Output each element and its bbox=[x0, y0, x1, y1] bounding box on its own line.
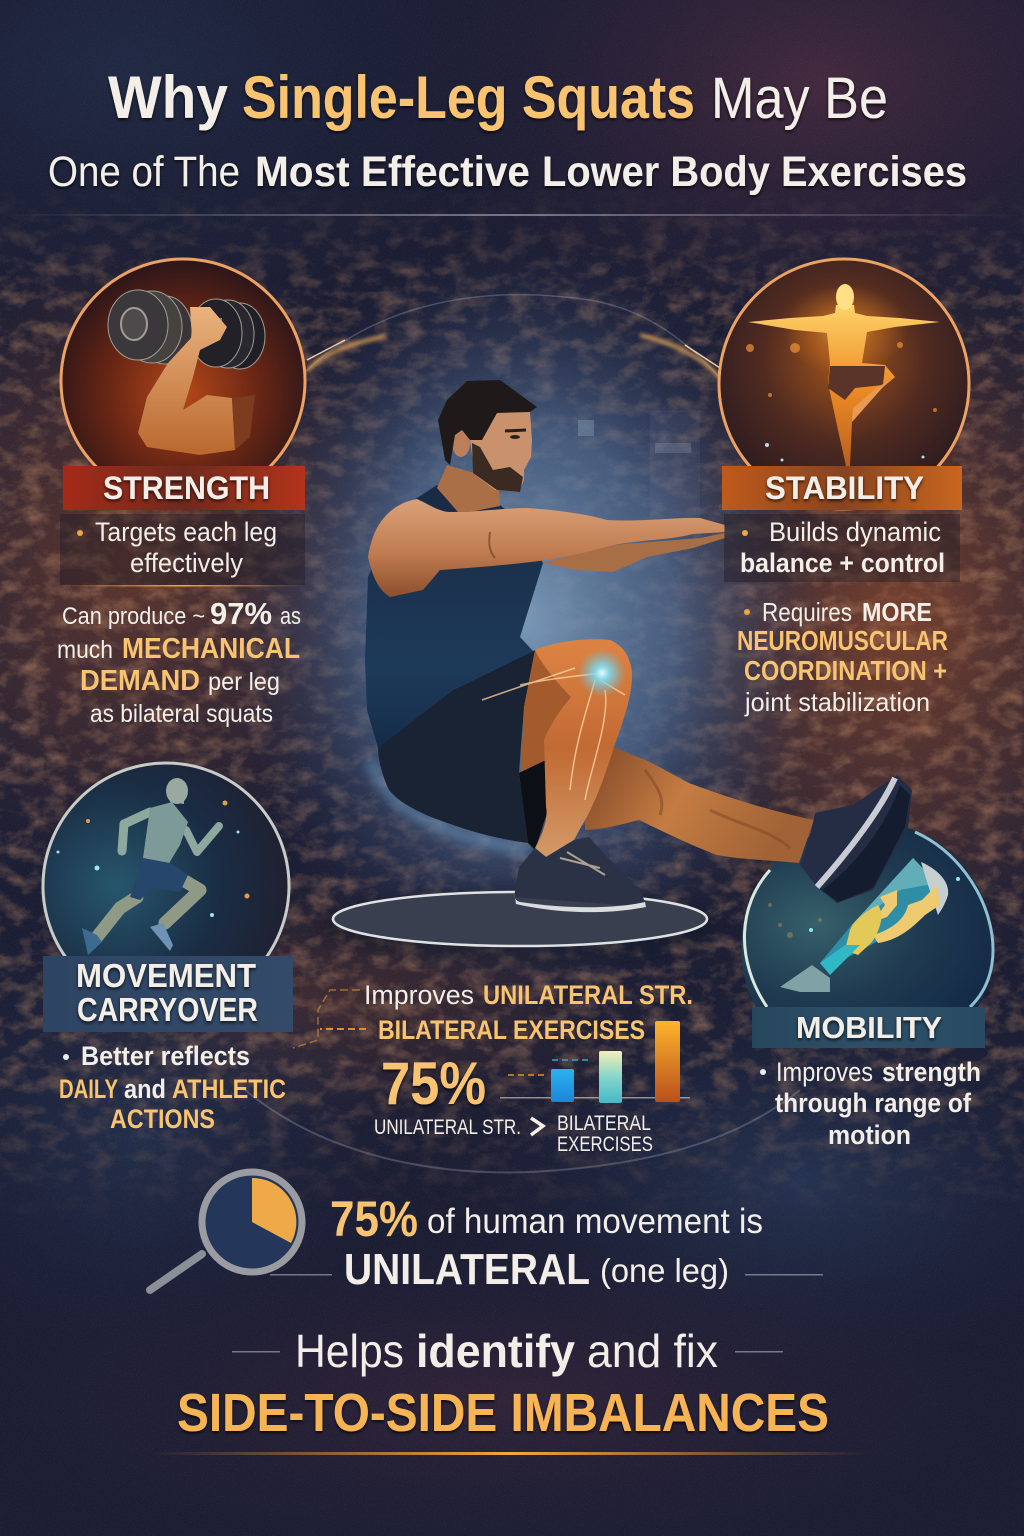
unilateral stat text: of human movement is bbox=[427, 1202, 763, 1241]
strength banner bbox=[63, 466, 305, 510]
mobility text: Improves bbox=[776, 1057, 873, 1087]
stability icon bbox=[718, 258, 970, 510]
back arm bbox=[543, 533, 725, 572]
hair bbox=[438, 380, 537, 465]
shorts bbox=[378, 650, 535, 843]
stability bullet bbox=[724, 514, 960, 582]
mobility text: motion bbox=[828, 1120, 911, 1150]
thigh underside bbox=[521, 650, 571, 772]
movement banner: MOVEMENT bbox=[76, 957, 256, 994]
strength bullet: effectively bbox=[130, 548, 243, 578]
closing statement: identify bbox=[416, 1325, 575, 1377]
strength detail text: MECHANICAL bbox=[122, 633, 300, 665]
movement text: and bbox=[124, 1074, 166, 1104]
strength detail text bbox=[57, 596, 301, 728]
comparison labels bbox=[374, 1112, 653, 1156]
knee glow bbox=[578, 649, 626, 697]
strength detail text: as bbox=[280, 603, 301, 630]
movement text: ATHLETIC bbox=[172, 1074, 286, 1104]
stat heading bbox=[364, 980, 693, 1045]
icon: runner bbox=[82, 778, 219, 955]
mobility banner bbox=[752, 1007, 985, 1048]
title: May Be bbox=[711, 66, 888, 131]
closing statement: and fix bbox=[587, 1325, 718, 1377]
movement text: DAILY bbox=[59, 1074, 118, 1104]
movement banner bbox=[43, 956, 293, 1032]
closing statement: SIDE-TO-SIDE IMBALANCES bbox=[177, 1383, 829, 1443]
icon: dumbbell bbox=[108, 290, 265, 369]
stability detail text: MORE bbox=[862, 597, 932, 627]
strength detail text: per leg bbox=[208, 668, 280, 696]
stability detail text bbox=[737, 597, 948, 717]
stat heading: UNILATERAL STR. bbox=[483, 980, 693, 1010]
strength banner: STRENGTH bbox=[103, 470, 270, 506]
strength bullet bbox=[60, 514, 305, 585]
comparison labels: BILATERAL bbox=[557, 1112, 651, 1135]
face bbox=[470, 410, 532, 492]
comparison labels: UNILATERAL STR. bbox=[374, 1116, 521, 1139]
central athlete figure bbox=[320, 380, 912, 963]
strength bullet: Targets each leg bbox=[95, 517, 277, 547]
beard bbox=[472, 443, 523, 492]
title: One of The bbox=[48, 148, 240, 196]
center stat panel bbox=[293, 980, 693, 1156]
strength detail text: Can produce ~ bbox=[62, 603, 205, 630]
movement text: ACTIONS bbox=[110, 1104, 215, 1134]
stability detail text: joint stabilization bbox=[744, 687, 930, 717]
neck bbox=[437, 465, 500, 512]
ear bbox=[452, 429, 470, 457]
stability detail text: COORDINATION + bbox=[744, 655, 947, 686]
title bbox=[48, 64, 967, 196]
stability detail text: NEUROMUSCULAR bbox=[737, 625, 948, 656]
stat heading: BILATERAL EXERCISES bbox=[378, 1015, 645, 1045]
strength detail text: as bilateral squats bbox=[90, 700, 273, 728]
title: Lower Body Exercises bbox=[542, 148, 967, 196]
movement banner: CARRYOVER bbox=[77, 991, 258, 1028]
panel: movement carryover bbox=[43, 956, 293, 1134]
icon: leg shoe bbox=[780, 965, 830, 992]
extended leg shoe bbox=[800, 775, 912, 903]
comparison labels: EXERCISES bbox=[557, 1133, 653, 1156]
unilateral stat text: UNILATERAL bbox=[344, 1245, 590, 1294]
movement text: Better reflects bbox=[81, 1041, 250, 1071]
strength detail text: much bbox=[57, 636, 113, 664]
stability detail text: Requires bbox=[762, 597, 852, 627]
panel: strength bbox=[57, 466, 305, 728]
stability banner bbox=[722, 466, 962, 510]
stability bullet: balance + control bbox=[740, 548, 945, 578]
front arm bbox=[368, 499, 725, 597]
stat number: 75% bbox=[381, 1050, 486, 1117]
mobility banner: MOBILITY bbox=[796, 1010, 942, 1045]
closing statement: Helps bbox=[295, 1325, 404, 1377]
icon: flexed arm bbox=[138, 307, 235, 455]
mobility text: strength bbox=[882, 1057, 981, 1087]
stat heading: Improves bbox=[364, 980, 474, 1010]
mobility icon bbox=[741, 822, 994, 1007]
icon: magnifier with pie bbox=[150, 1172, 302, 1290]
mobility text bbox=[760, 1057, 981, 1150]
icon: balancing figure bbox=[748, 284, 940, 466]
bar chart bbox=[500, 1021, 690, 1103]
movement icon bbox=[42, 762, 290, 1010]
icon: glowing leg bbox=[780, 858, 948, 992]
panel: stability bbox=[722, 466, 962, 717]
title: Why bbox=[108, 64, 229, 131]
unilateral stat text: 75% bbox=[330, 1191, 418, 1247]
icon: sleeve bbox=[232, 395, 255, 450]
title: Single-Leg Squats bbox=[242, 64, 695, 131]
mobility text: through range of bbox=[775, 1088, 972, 1118]
stability banner: STABILITY bbox=[765, 470, 924, 506]
strength detail text: DEMAND bbox=[80, 665, 200, 697]
standing shoe bbox=[514, 837, 646, 912]
unilateral stat text: (one leg) bbox=[600, 1252, 729, 1289]
title: Most Effective bbox=[255, 148, 530, 196]
stability bullet: Builds dynamic bbox=[769, 517, 941, 547]
strength icon bbox=[60, 258, 306, 466]
platform disc bbox=[320, 887, 720, 963]
unilateral stat text bbox=[270, 1191, 823, 1294]
panel: mobility bbox=[752, 1007, 985, 1150]
eye and brow bbox=[505, 430, 526, 439]
closing statement bbox=[177, 1325, 829, 1443]
movement text bbox=[59, 1041, 286, 1134]
standing leg bbox=[535, 639, 632, 857]
tank top bbox=[365, 485, 543, 748]
strength detail text: 97% bbox=[210, 596, 272, 631]
extended leg bbox=[585, 745, 814, 863]
